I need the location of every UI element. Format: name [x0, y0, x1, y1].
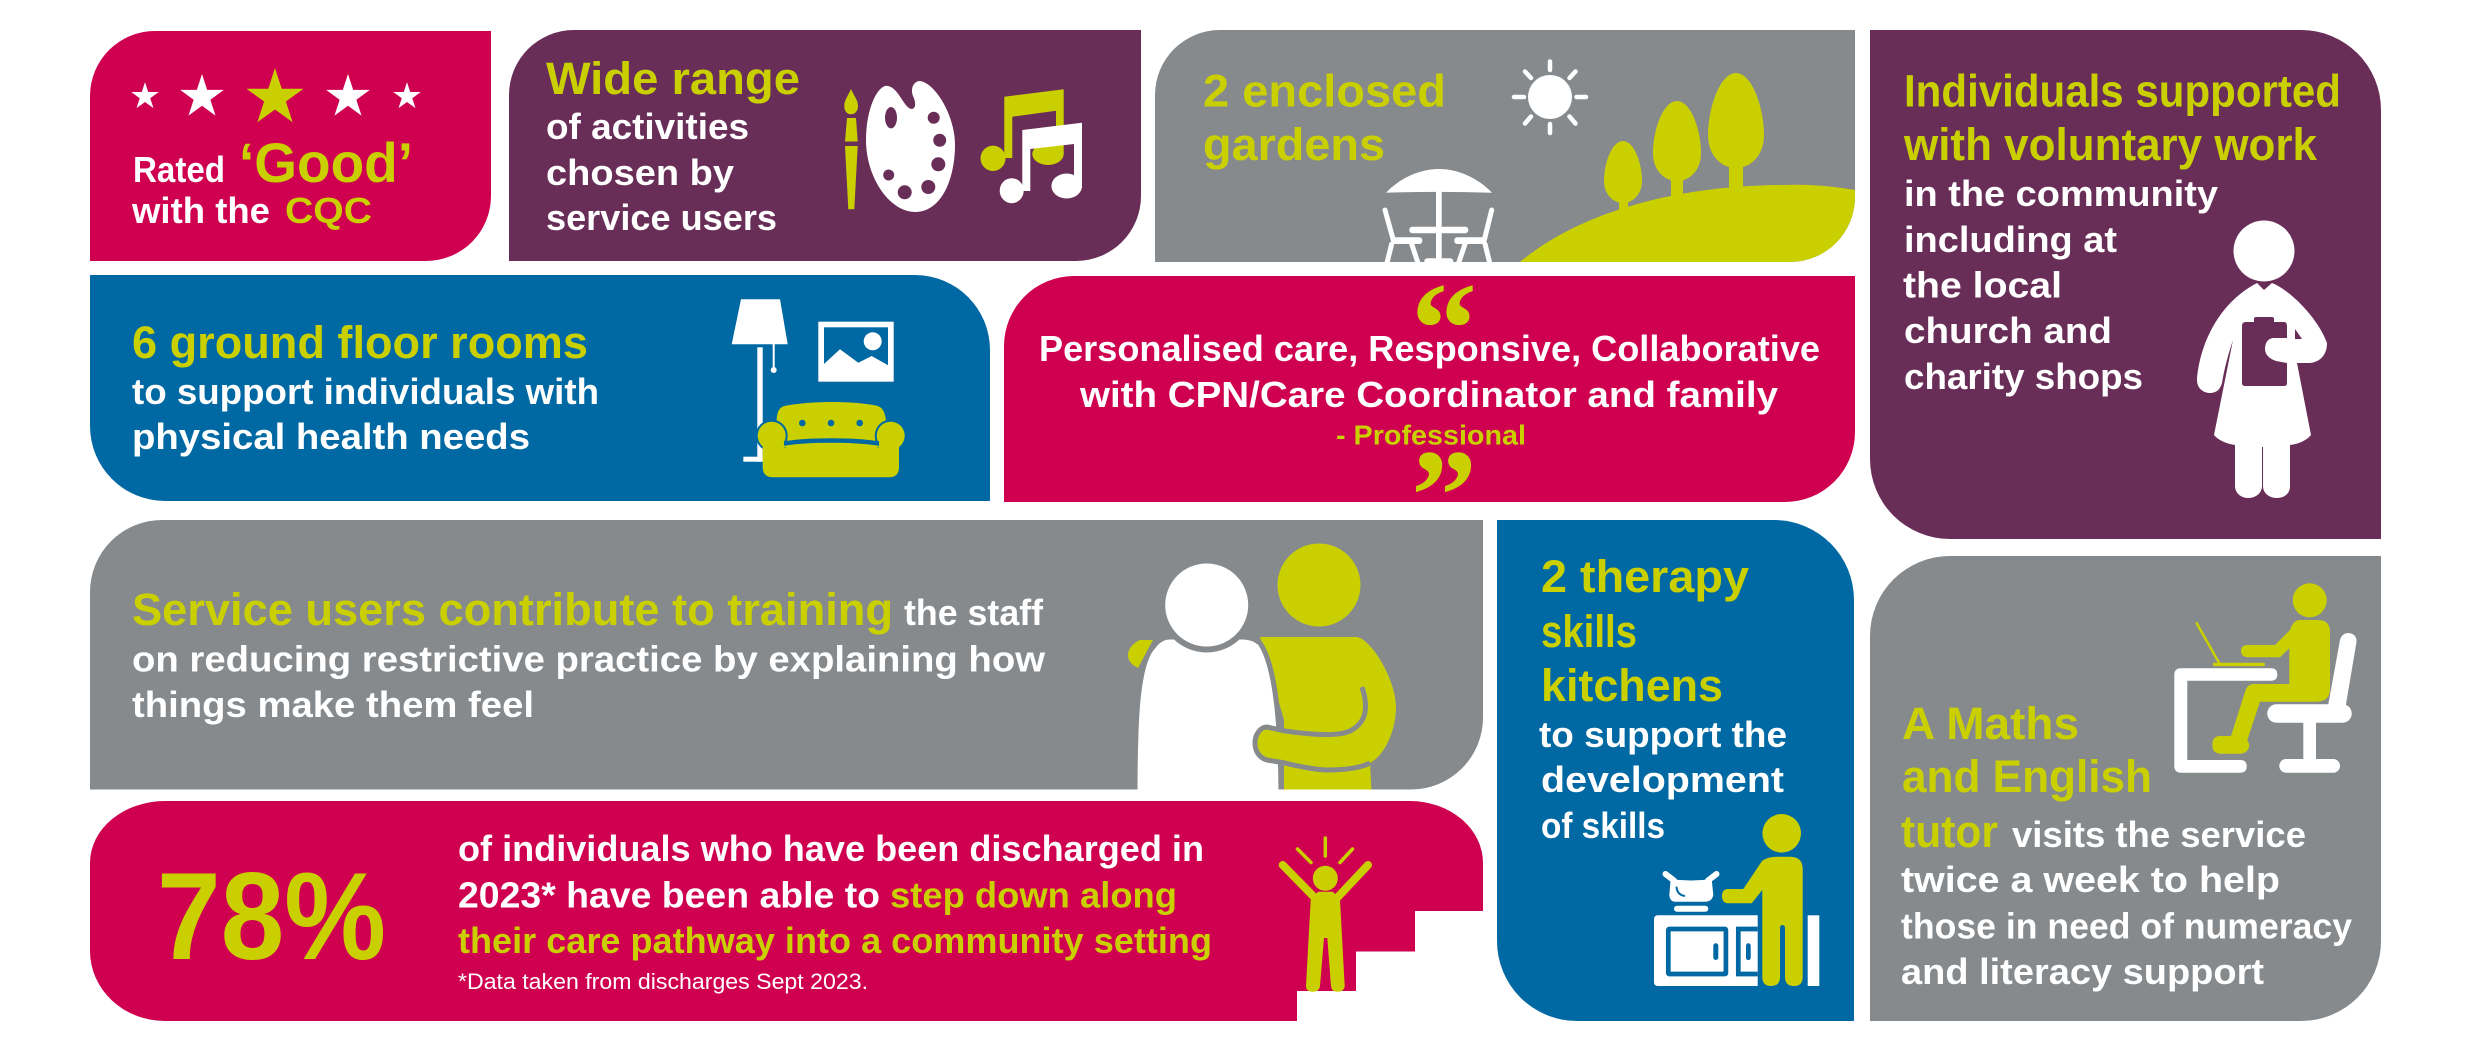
- panel: enclosed gardens: [1155, 30, 1855, 264]
- text: wide range of activities: service users: [546, 197, 777, 238]
- text: wide range of activities: [546, 53, 800, 238]
- text: 6 ground floor rooms: [132, 317, 599, 457]
- text: wide range of activities: Wide range: [546, 53, 800, 104]
- panel: activities: [509, 30, 1141, 261]
- icon: person with clipboard: [2197, 220, 2327, 498]
- panel: CQC rating: [90, 31, 491, 261]
- text: training: Service users contribute to training: [132, 584, 893, 635]
- panel: voluntary work: [1870, 30, 2381, 539]
- card background: [90, 520, 1483, 790]
- text: rated good with the CQC: with the: [131, 190, 270, 231]
- text: rated good with the CQC: ‘Good’: [239, 131, 413, 194]
- card background: [90, 275, 990, 501]
- text: therapy kitchens: kitchens: [1541, 660, 1723, 711]
- icon: sun: [1514, 62, 1586, 133]
- panel: professional quote: [1004, 255, 1855, 569]
- text: discharge statement: their care pathway into a community setting: [458, 920, 1212, 961]
- text: therapy kitchens: [1539, 551, 1787, 846]
- card background: [1155, 30, 1855, 262]
- icon: palette: [866, 81, 955, 212]
- text: voluntary work in the community: in the community: [1904, 173, 2218, 214]
- icon: five stars: [131, 68, 421, 122]
- text: discharge statement: 2023* have been able to: [458, 874, 880, 916]
- card background: [1870, 556, 2381, 1021]
- text: 6 ground floor rooms: 6 ground floor rooms: [132, 317, 588, 368]
- text: training: [132, 584, 1046, 725]
- text: voluntary work in the community: the local: [1903, 264, 2062, 306]
- icon: person at laptop: [2197, 583, 2330, 754]
- icon: floor lamp: [732, 299, 788, 462]
- text: voluntary work in the community: Individuals supported: [1904, 66, 2341, 116]
- icon: kitchen units and mixer: [1654, 874, 1819, 986]
- text: quote: - Professional: [1336, 420, 1526, 450]
- card background: [1004, 276, 1855, 502]
- text: voluntary work in the community: church and: [1904, 310, 2112, 351]
- text: 6 ground floor rooms: physical health needs: [132, 416, 530, 457]
- icon: sofa: [756, 402, 907, 477]
- panel: maths and English tutor: [1870, 556, 2381, 1021]
- text: training: the staff: [904, 592, 1044, 633]
- text: 2 enclosed gardens: 2 enclosed: [1203, 66, 1446, 116]
- footnote: *Data taken from discharges Sept 2023.: [458, 969, 868, 994]
- text: therapy kitchens: to support the: [1539, 714, 1787, 755]
- text: voluntary work in the community: with voluntary work: [1903, 119, 2318, 170]
- text: therapy kitchens: skills: [1541, 606, 1637, 657]
- icon: two people hugging: [1128, 544, 1396, 800]
- panel: therapy skills kitchens: [1497, 520, 1854, 1021]
- text: voluntary work in the community: including at: [1904, 219, 2117, 260]
- text: wide range of activities: of activities: [546, 106, 749, 147]
- text: 6 ground floor rooms: to support individuals with: [132, 371, 599, 412]
- text: quote: with CPN/Care Coordinator and family: [1079, 374, 1778, 415]
- big number: 78%: [157, 848, 386, 986]
- card background: [1497, 520, 1854, 1021]
- text: tutor: and literacy support: [1901, 951, 2264, 992]
- text: 2 enclosed gardens: [1203, 66, 1446, 170]
- text: tutor: A Maths: [1902, 698, 2079, 749]
- panel: service users contribute to training: [90, 520, 1483, 800]
- text: tutor: those in need of numeracy: [1901, 906, 2352, 946]
- text: voluntary work in the community: charity shops: [1904, 356, 2143, 397]
- icon: desk and chair: [2174, 633, 2357, 773]
- text: training: on reducing restrictive practice by explaining how: [132, 638, 1046, 680]
- icon: music notes: [980, 89, 1082, 203]
- card background: [1870, 30, 2381, 539]
- text: discharge statement: of individuals who have been discharged in: [458, 828, 1204, 869]
- icon: closing quotation mark: ”: [1411, 422, 1477, 569]
- icon: opening quotation mark: “: [1411, 255, 1477, 402]
- icon: celebrating person: [1283, 838, 1368, 992]
- text: therapy kitchens: development: [1541, 759, 1784, 800]
- icon: parasol table and chairs: [1385, 169, 1492, 264]
- text: voluntary work in the community: [1903, 66, 2341, 397]
- text: wide range of activities: chosen by: [546, 152, 734, 193]
- text: tutor: [1901, 698, 2352, 992]
- text: tutor: tutor: [1901, 806, 1998, 857]
- card background: [90, 31, 491, 261]
- text: therapy kitchens: of skills: [1541, 805, 1665, 846]
- text: discharge statement: step down along: [890, 874, 1177, 916]
- text: training: things make them feel: [132, 684, 534, 725]
- text: discharge statement: [458, 828, 1212, 961]
- icon: paint brush: [844, 89, 858, 209]
- icon: trees on hill: [1520, 73, 1855, 262]
- panel: 78 percent step down: [90, 801, 1483, 1021]
- text: quote: [1039, 328, 1820, 450]
- panel: ground floor rooms: [90, 275, 990, 501]
- card background: [90, 801, 1483, 1021]
- text: 2 enclosed gardens: gardens: [1203, 119, 1385, 170]
- text: quote: Personalised care, Responsive, Collaborative: [1039, 328, 1820, 369]
- text: rated good with the CQC: CQC: [285, 190, 372, 231]
- text: tutor: and English: [1902, 751, 2152, 802]
- icon: person cooking: [1722, 814, 1803, 986]
- text: therapy kitchens: 2 therapy: [1541, 551, 1749, 602]
- text: rated good with the CQC: Rated: [133, 149, 225, 190]
- icon: framed picture: [818, 322, 894, 382]
- card background: [509, 30, 1141, 261]
- text: tutor: twice a week to help: [1901, 859, 2280, 900]
- text: tutor: visits the service: [2012, 814, 2306, 855]
- text: rated good with the CQC: [131, 131, 413, 231]
